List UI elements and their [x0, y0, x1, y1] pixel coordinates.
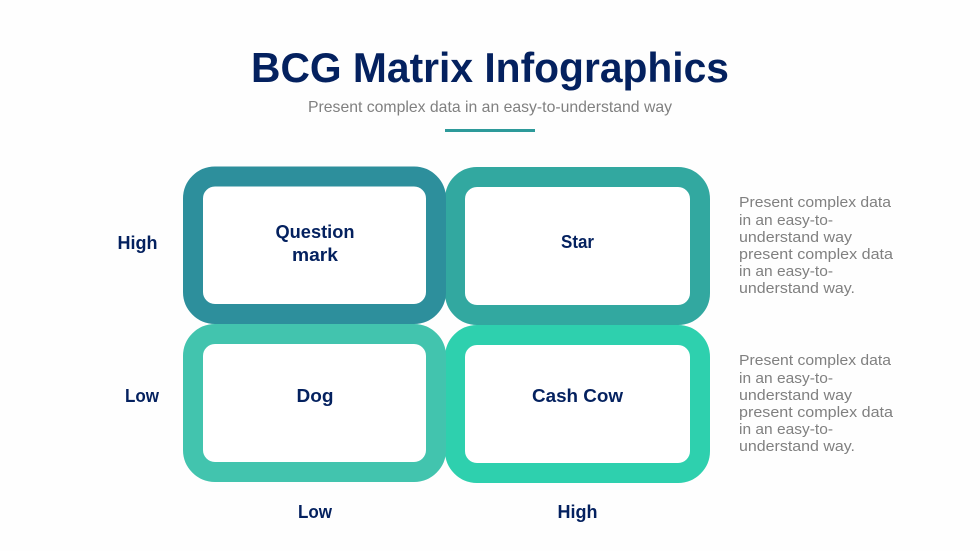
- text block: bottom description: Present complex data: [739, 352, 892, 369]
- text block: bottom description: understand way: [739, 387, 853, 404]
- axis label: low row: Low: [125, 386, 160, 406]
- text block: top description: understand way.: [739, 280, 855, 297]
- panel: question mark: [193, 176, 436, 314]
- panel: cash cow: [455, 335, 700, 473]
- text block: top description: in an easy-to-: [739, 212, 833, 229]
- text block: bottom description: in an easy-to-: [739, 421, 833, 438]
- subtitle: Present complex data in an easy-to-understand way: [308, 99, 672, 116]
- text block: top description: understand way: [739, 229, 853, 246]
- label: star: Star: [561, 232, 594, 252]
- text block: top description: in an easy-to-: [739, 263, 833, 280]
- title: BCG Matrix Infographics: [251, 44, 729, 91]
- text block: bottom description: present complex data: [739, 404, 894, 421]
- label: cash cow: Cash Cow: [532, 386, 624, 406]
- panel: star: [455, 177, 700, 315]
- label: question mark: Question: [276, 222, 354, 242]
- label: question mark: mark: [292, 245, 339, 265]
- axis label: low column: Low: [298, 502, 333, 522]
- axis label: high row: High: [118, 233, 158, 253]
- axis label: high column: High: [558, 502, 598, 522]
- text block: top description: present complex data: [739, 246, 894, 263]
- text block: top description: Present complex data: [739, 194, 892, 211]
- panel: dog: [193, 334, 436, 472]
- title underline: [445, 129, 535, 132]
- text block: bottom description: in an easy-to-: [739, 370, 833, 387]
- label: dog: Dog: [296, 386, 334, 406]
- text block: bottom description: understand way.: [739, 438, 855, 455]
